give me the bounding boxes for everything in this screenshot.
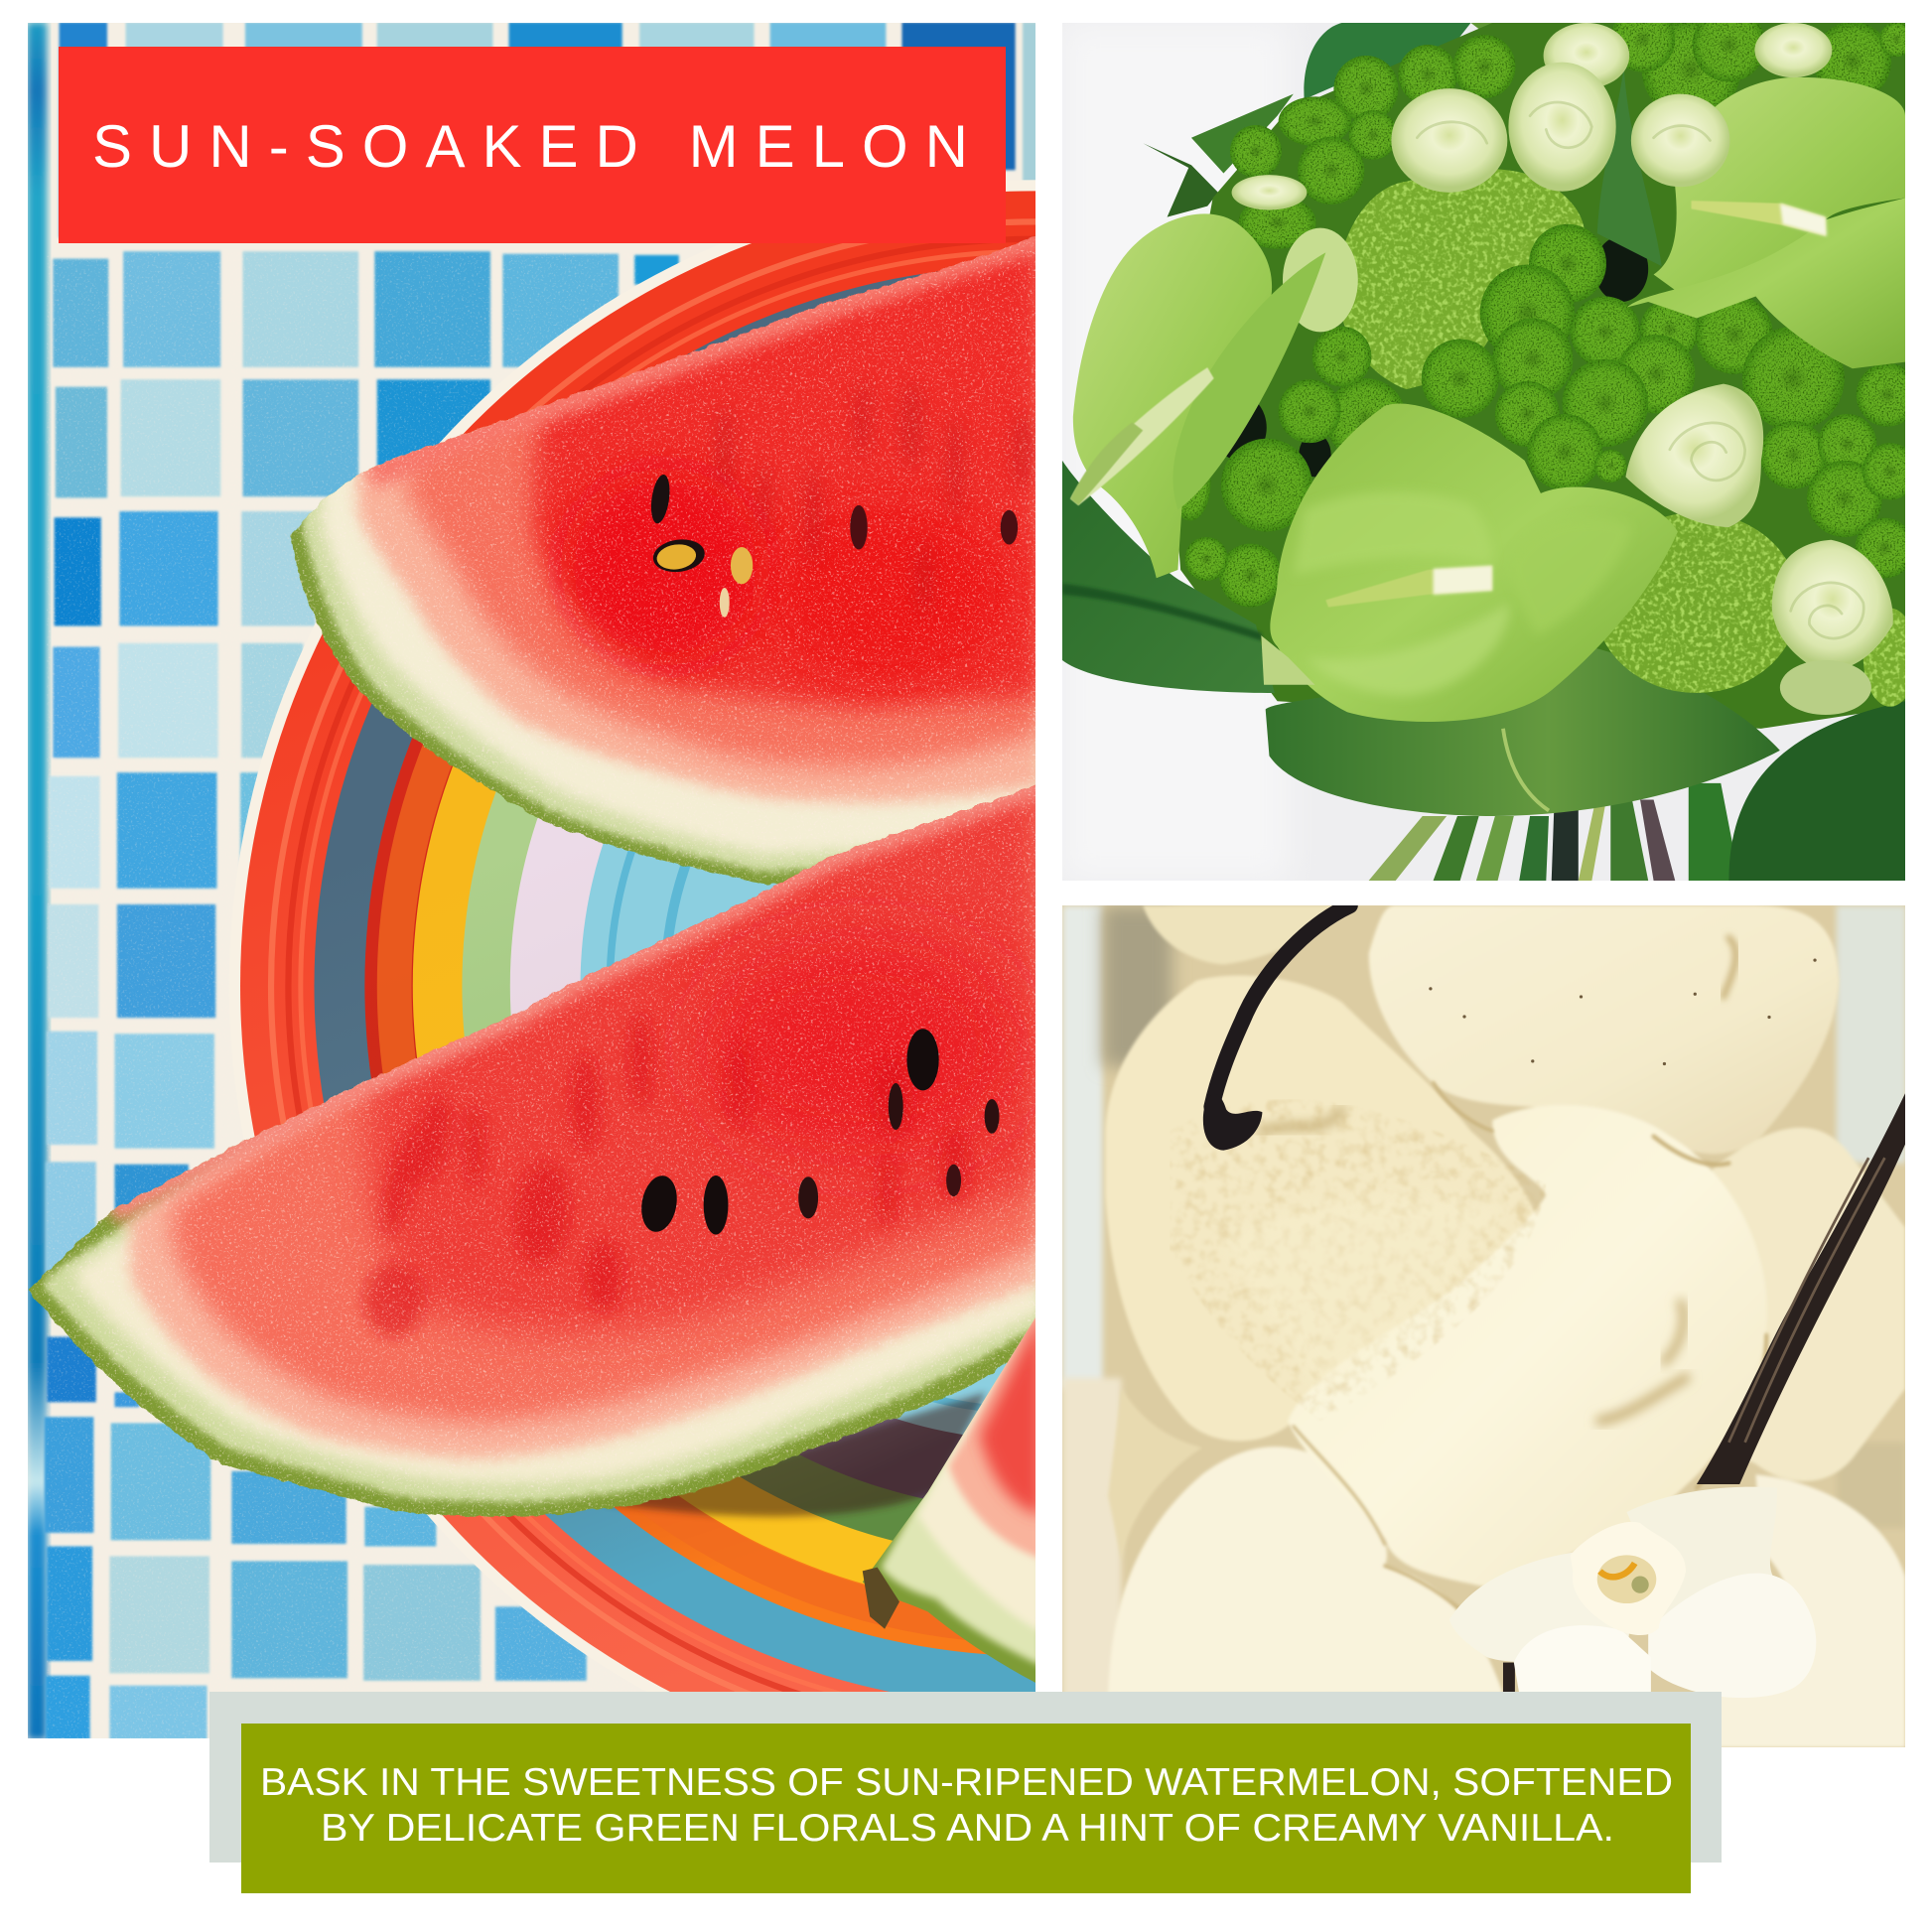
caption panel (241, 1724, 1691, 1893)
tile sparkle (47, 252, 638, 1739)
upper back leaves (1143, 23, 1546, 217)
dark interior mass (1170, 23, 1905, 729)
caption text (260, 1761, 1673, 1850)
vanilla pods (1203, 905, 1905, 1694)
pointed dark leaf (1597, 67, 1662, 266)
dark leaf left (1062, 461, 1275, 693)
watermelon slice: corner (862, 1317, 1035, 1683)
caption backing panel (209, 1692, 1722, 1863)
white orchid (1449, 1487, 1816, 1698)
stems (1369, 783, 1739, 881)
bottom right leaf (1728, 701, 1905, 881)
dish walls (1062, 905, 1906, 1748)
watermelon slice: upper (290, 236, 1035, 886)
panel: watermelon photo (28, 23, 1035, 1738)
ice cream scoops (1105, 905, 1905, 1747)
slice shadow on plate (604, 1392, 986, 1516)
lower slice seeds (637, 1029, 1000, 1235)
flesh streaks (363, 1013, 970, 1337)
pale green roses (1232, 23, 1893, 715)
striped plate (229, 180, 1841, 1792)
anthurium: centre (1261, 404, 1678, 722)
dark gaps (1213, 236, 1648, 477)
caption text: BY DELICATE GREEN FLORALS AND A HINT OF CREAMY VANILLA. (321, 1807, 1614, 1850)
panel: vanilla ice cream photo (1062, 905, 1905, 1747)
mosaic tiles (45, 22, 1037, 1739)
panel: green bouquet photo (1062, 23, 1905, 881)
flesh streaks (715, 382, 1033, 617)
vanilla flecks (1429, 959, 1817, 1065)
anthurium: top right (1627, 77, 1905, 368)
scoop shading (1261, 937, 1766, 1619)
green button mums (1170, 6, 1919, 607)
upper slice seeds (648, 474, 1018, 618)
title banner (59, 47, 1006, 243)
crumbly texture (1170, 1099, 1546, 1421)
bottom wrapped leaf (1266, 646, 1780, 816)
watermelon slice: lower (28, 784, 1035, 1517)
chrysanthemums (1336, 169, 1917, 707)
caption text: BASK IN THE SWEETNESS OF SUN-RIPENED WATERMELON, SOFTENED (260, 1761, 1673, 1804)
anthurium: left (1070, 213, 1358, 578)
title text: SUN-SOAKED MELON (92, 113, 968, 180)
